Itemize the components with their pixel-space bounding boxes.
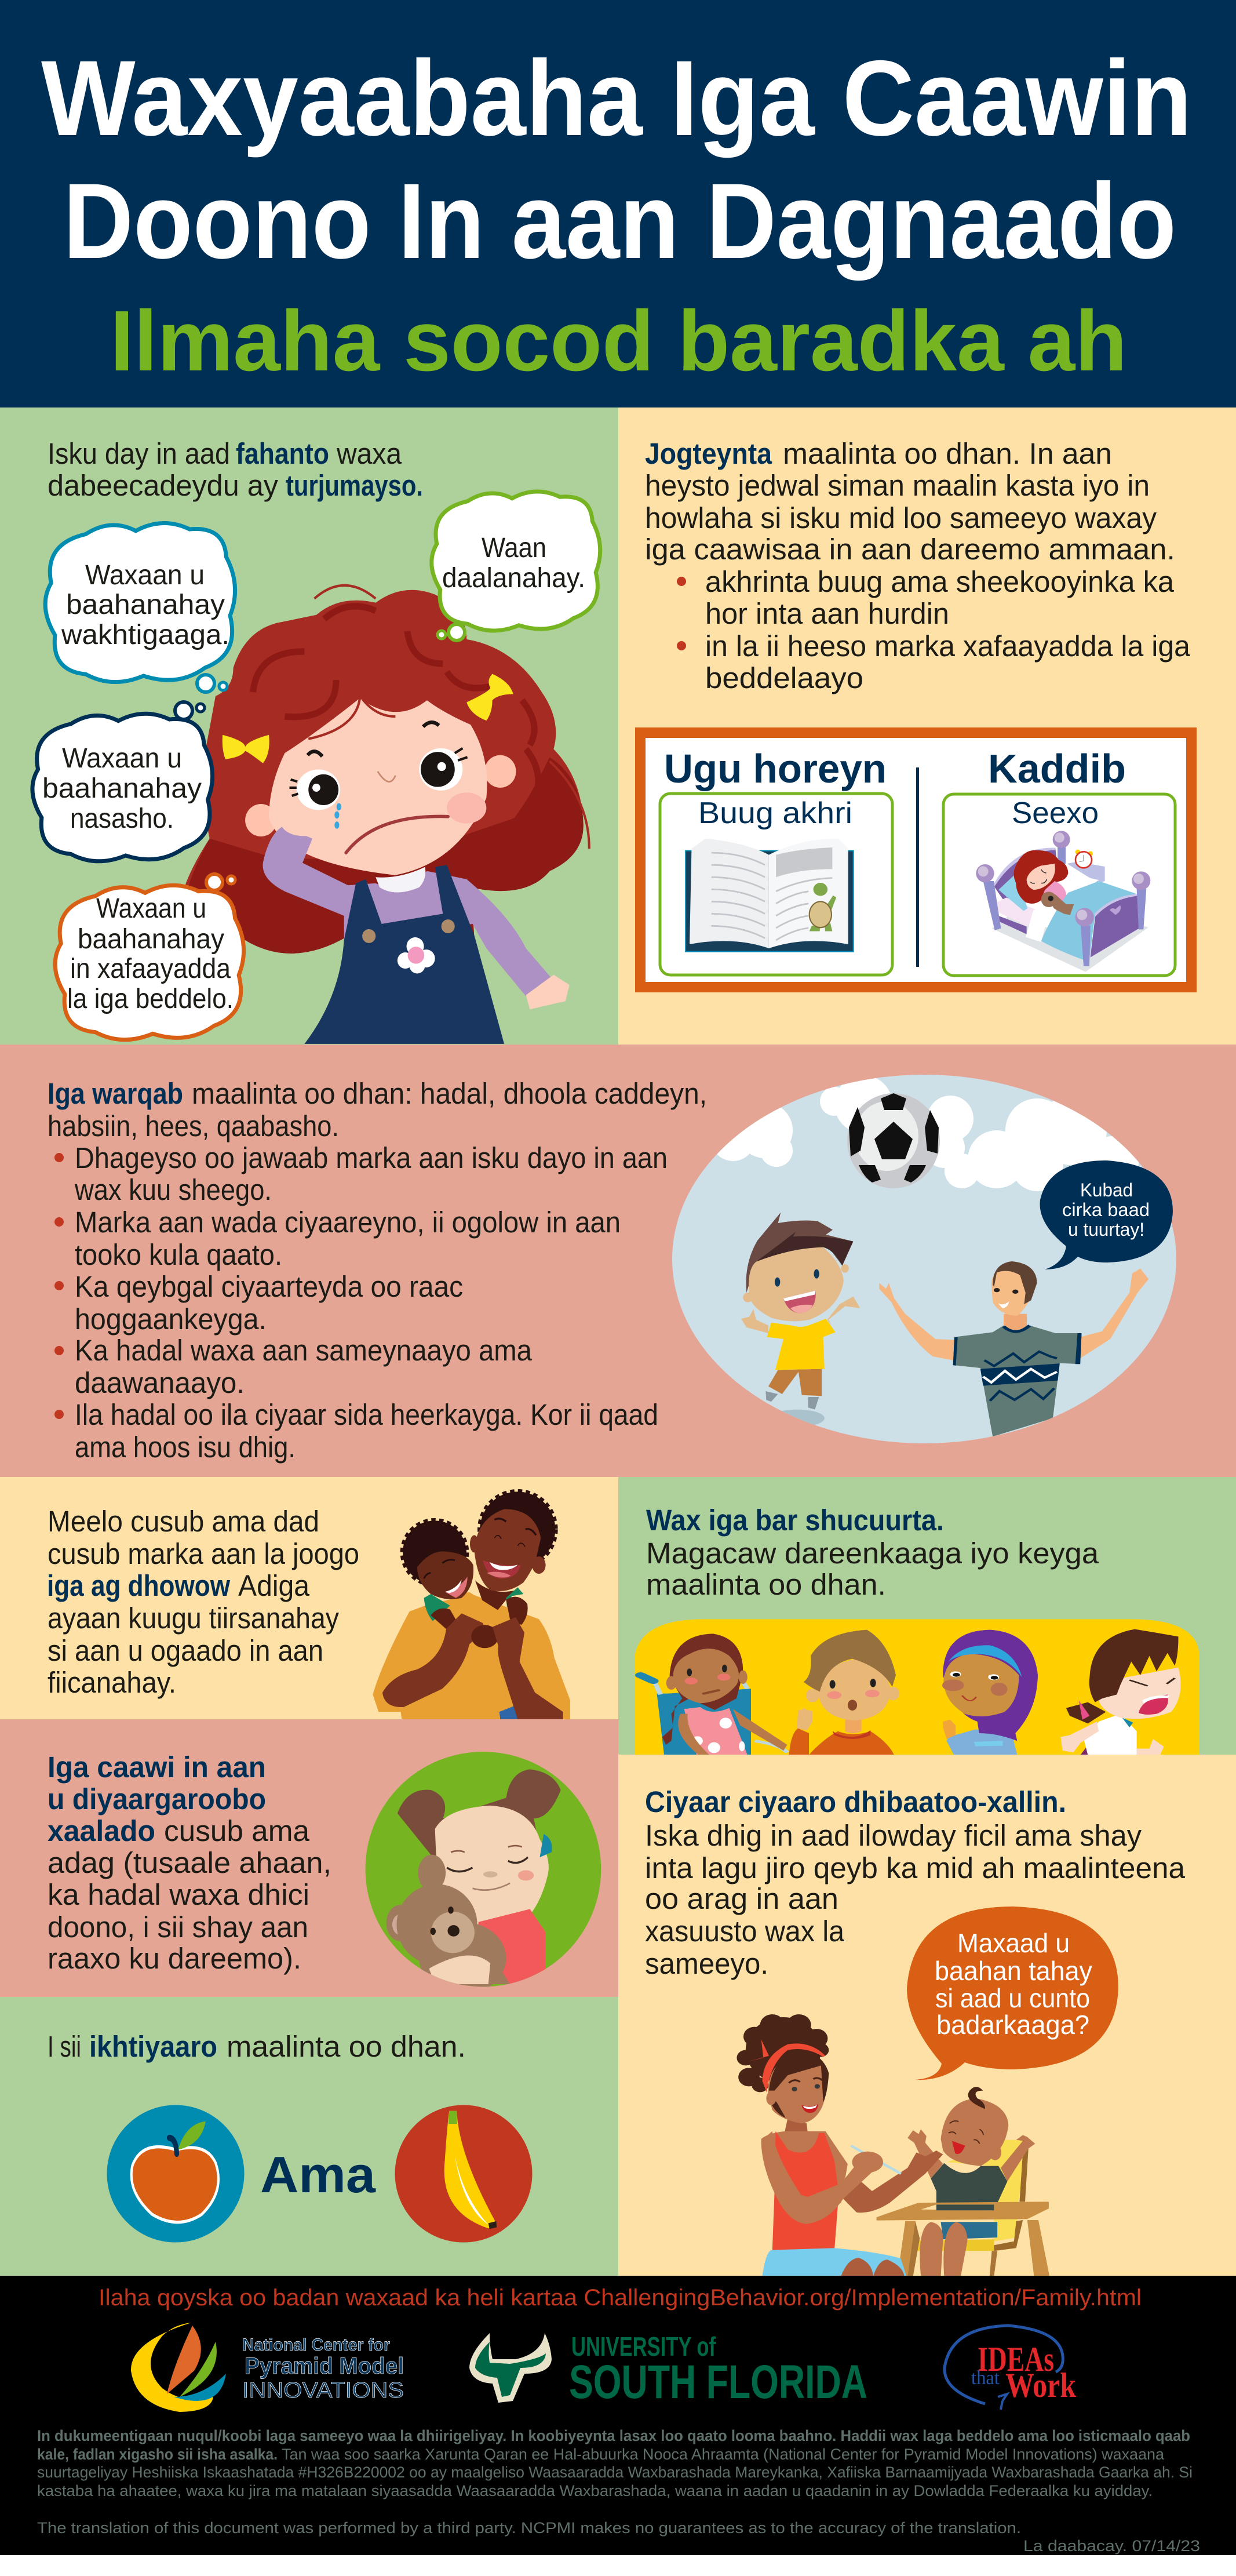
attention text list: Ka hadal waxa aan sameynaayo ama [75, 1334, 533, 1367]
routines text: Jogteynta [645, 437, 772, 470]
problem solving text [645, 1785, 1186, 1980]
speech bubble: spoon question [907, 1906, 1118, 2080]
panel: yellow routines [618, 407, 1236, 1045]
prepare text: xaalado [48, 1814, 155, 1847]
choices text: I sii [48, 2030, 81, 2063]
illustration: mother feeding baby [737, 2014, 1049, 2276]
attention text list: ama hoos isu dhig. [75, 1431, 296, 1464]
copyright and funding statement: In dukumeentigaan nuqul/koobi laga sameeyo waa la dhiirigeliyay. In koobiyeynta lasax loo qaato looma baahno. Haddii wax laga beddelo ama loo isticmaalo qaab [37, 2427, 1190, 2444]
tray [877, 2202, 1049, 2221]
panel: green understand behavior [0, 407, 618, 1045]
attention text list: Iga warqab [48, 1077, 183, 1110]
attention text list: Ka qeybgal ciyaarteyda oo raac [75, 1270, 463, 1303]
attention text list: maalinta oo dhan: hadal, dhoola caddeyn, [192, 1077, 707, 1110]
prepare text: Iga caawi in aan [48, 1751, 266, 1784]
routines text: howlaha si isku mid loo sameeyo waxay [645, 501, 1157, 534]
problem solving text: oo arag in aan [645, 1882, 838, 1915]
problem solving text: Iska dhig in aad ilowday ficil ama shay [645, 1819, 1142, 1852]
stay close text: fiicanahay. [48, 1666, 176, 1699]
icon: open book with turtle [686, 839, 854, 952]
mother [737, 2014, 829, 2092]
translation disclaimer: The translation of this document was performed by a third party. NCPMI makes no guarantees as to the accuracy of the translation. [37, 2519, 1021, 2537]
icon: soccer ball [847, 1093, 940, 1188]
speech bubble: nice throw [1040, 1160, 1173, 1269]
panel: give choices [0, 1997, 618, 2276]
logo: IDEAs that Work: that [971, 2367, 1000, 2389]
panel: pink pay attention [0, 1045, 1236, 1477]
speech bubble: nice throw: u tuurtay! [1068, 1219, 1144, 1240]
choices text: maalinta oo dhan. [227, 2030, 466, 2063]
prepare text: adag (tusaale ahaan, [48, 1846, 331, 1879]
routines text: beddelaayo [705, 661, 863, 694]
speech bubble: time: baahanahay [66, 590, 225, 620]
routines text [645, 437, 1191, 694]
speech bubble: hurt: daalanahay. [442, 563, 585, 594]
routines text: heysto jedwal siman maalin kasta iyo in [645, 469, 1150, 502]
attention text list: Marka aan wada ciyaareyno, ii ogolow in aan [75, 1206, 621, 1239]
attention text list: Ila hadal oo ila ciyaar sida heerkayga. Kor ii qaad [75, 1398, 658, 1431]
panel: problem-solving play [618, 1755, 1236, 2276]
panel: title header [0, 0, 1236, 407]
attention text list: daawanaayo. [75, 1366, 245, 1399]
panel: footer [0, 2276, 1236, 2555]
attention text list [48, 1077, 707, 1464]
speech bubble: rest [32, 702, 213, 861]
stay close text: si aan u ogaado in aan [48, 1634, 323, 1667]
attention text list: Dhageyso oo jawaab marka aan isku dayo in aan [75, 1141, 668, 1174]
illustration: boy and father playing ball [672, 1075, 1176, 1443]
speech bubble: activity change: Waxaan u [96, 893, 206, 924]
problem solving text: xasuusto wax la [645, 1915, 845, 1948]
choices text: ikhtiyaaro [89, 2030, 217, 2063]
logo: IDEAs that Work [945, 2326, 1077, 2410]
stay close text: cusub marka aan la joogo [48, 1537, 359, 1570]
prepare text [48, 1751, 331, 1975]
man [879, 1283, 954, 1360]
first heading: Ugu horeyn [664, 746, 887, 791]
icon: banana [395, 2105, 532, 2242]
attention text list: habsiin, hees, qaabasho. [48, 1109, 339, 1143]
intro text: turjumayso. [286, 469, 423, 502]
speech bubble: spoon question: si aad u cunto [935, 1983, 1090, 2013]
child with hijab [947, 1729, 1017, 1755]
copyright and funding statement: kastaba ha ahaatee, waxa ku jira ma matalaan siyaasadda Waasaaradda Waxbarashada, waana in aadan u qaadanin in ay Dowladda Federaalka ku ayidday. [37, 2482, 1153, 2499]
speech bubble: nice throw: cirka baad [1062, 1199, 1150, 1220]
feelings text: maalinta oo dhan. [646, 1568, 886, 1601]
routines text: in la ii heeso marka xafaayadda la iga [705, 630, 1191, 663]
then card [943, 794, 1175, 976]
panel: stay close [0, 1477, 618, 1719]
copyright and funding statement: Tan waa soo saarka Xarunta Qaran ee Hal-abuurka Nooca Ahraamta (National Center for Pyramid Model Innovations) waxaana [282, 2446, 1165, 2463]
logo: Pyramid Model Innovations [131, 2323, 404, 2412]
intro text: fahanto [236, 437, 329, 470]
logo: University of South Florida: SOUTH FLORIDA [569, 2356, 867, 2408]
speech bubble: activity change [55, 874, 244, 1040]
routines text: iga caawisaa in aan dareemo ammaan. [645, 533, 1175, 566]
illustration: girl hugging teddy bear [366, 1752, 601, 1995]
logo: University of South Florida [469, 2331, 867, 2408]
attention text list: hoggaankeyga. [75, 1302, 267, 1336]
intro text: Isku day in aad [48, 437, 230, 470]
illustration: sad girl with red hair [185, 585, 589, 1044]
routines text: hor inta aan hurdin [705, 597, 949, 630]
logo: Pyramid Model Innovations: INNOVATIONS [242, 2378, 404, 2403]
baby [941, 2222, 997, 2239]
feelings text: Magacaw dareenkaaga iyo keyga [646, 1537, 1099, 1570]
routines text: maalinta oo dhan. In aan [783, 437, 1112, 470]
boy [741, 1309, 768, 1333]
intro text: dabeecadeydu ay [48, 469, 278, 502]
feelings text [646, 1504, 1099, 1601]
website link line: Ilaha qoyska oo badan waxaad ka heli kartaa ChallengingBehavior.org/Implementation/Family.html [99, 2285, 1142, 2311]
child angry [1081, 1748, 1088, 1755]
problem solving text: Ciyaar ciyaaro dhibaatoo-xallin. [645, 1785, 1066, 1818]
subtitle: Ilmaha socod baradka ah [110, 293, 1127, 389]
stay close text [47, 1505, 359, 1699]
logo: Pyramid Model Innovations: Pyramid Model [245, 2353, 404, 2379]
prepare text: cusub ama [164, 1814, 310, 1847]
icon: apple [107, 2105, 245, 2242]
stay close text: Adiga [238, 1569, 310, 1602]
speech bubble: activity change: in xafaayadda [70, 954, 231, 984]
logo: IDEAs that Work: IDEAs [978, 2340, 1054, 2378]
speech bubble: time: Waxaan u [85, 560, 205, 591]
logo: University of South Florida: UNIVERSITY of [571, 2331, 716, 2362]
problem solving text: inta lagu jiro qeyb ka mid ah maalinteena [645, 1851, 1186, 1884]
first card [660, 794, 892, 975]
attention text list: tooko kula qaato. [75, 1238, 282, 1271]
routines text: akhrinta buug ama sheekooyinka ka [705, 565, 1175, 598]
icon: girl sleeping in bed [976, 831, 1150, 972]
speech bubble: rest: nasasho. [70, 803, 174, 834]
problem solving text: sameeyo. [645, 1947, 768, 1980]
speech bubble: rest: baahanahay [42, 773, 202, 804]
stay close text: ayaan kuugu tiirsanahay [48, 1602, 339, 1635]
panel: teach feelings [618, 1477, 1236, 1755]
copyright and funding statement [37, 2427, 1193, 2499]
speech bubble: activity change: baahanahay [78, 924, 224, 955]
attention text list: wax kuu sheego. [74, 1173, 272, 1206]
choices text [48, 2030, 466, 2063]
illustration: father carrying child [373, 1491, 570, 1719]
then heading: Kaddib [988, 746, 1126, 791]
panel: prepare for transitions [0, 1719, 618, 1997]
then card: Seexo [1012, 796, 1099, 830]
intro text [48, 437, 423, 502]
speech bubble: nice throw: Kubad [1080, 1180, 1133, 1200]
copyright and funding statement: suurtageliyay Heshiiska Iskaashatada #H326B220002 oo ay maalgeliso Waasaaradda Waxbarashada Mareykanka, Xafiiska Barnaamijyada Waxbarashada Gaarka ah. Si [37, 2464, 1193, 2481]
logo: IDEAs that Work: Work [1005, 2366, 1077, 2404]
speech bubble: hurt: Waan [482, 533, 546, 563]
speech bubble: spoon question: baahan tahay [935, 1956, 1092, 1986]
first card: Buug akhri [698, 796, 852, 830]
prepare text: raaxo ku dareemo). [48, 1942, 301, 1975]
copyright and funding statement: kale, fadlan xigasho sii isha asalka. [37, 2446, 278, 2463]
prepare text: ka hadal waxa dhici [48, 1878, 309, 1911]
stay close text: iga ag dhowow [47, 1569, 230, 1602]
child surprised [789, 1729, 809, 1755]
first-then board [640, 733, 1191, 987]
word: or: Ama [260, 2146, 376, 2203]
feelings text: Wax iga bar shucuurta. [646, 1504, 944, 1537]
illustration: four children with feelings [635, 1619, 1199, 1755]
hair bows [223, 735, 269, 763]
prepare text: doono, i sii shay aan [48, 1911, 308, 1944]
speech bubble: time: wakhtigaaga. [61, 620, 229, 650]
speech bubble: spoon question: badarkaaga? [936, 2010, 1089, 2040]
print date: La daabacay. 07/14/23 [1023, 2537, 1200, 2555]
intro text: waxa [336, 437, 402, 470]
speech bubble: time [45, 523, 235, 692]
jump shadow [782, 1410, 825, 1425]
speech bubble: activity change: la iga beddelo. [67, 984, 234, 1014]
child in wheelchair [657, 1689, 751, 1755]
stay close text: Meelo cusub ama dad [48, 1505, 319, 1538]
high chair [947, 2140, 1027, 2242]
prepare text: u diyaargaroobo [48, 1782, 266, 1815]
speech bubble: hurt [432, 492, 600, 641]
speech bubble: spoon question: Maxaad u [957, 1928, 1070, 1958]
speech bubble: rest: Waxaan u [62, 743, 182, 774]
logo: Pyramid Model Innovations: National Center for [242, 2335, 390, 2355]
